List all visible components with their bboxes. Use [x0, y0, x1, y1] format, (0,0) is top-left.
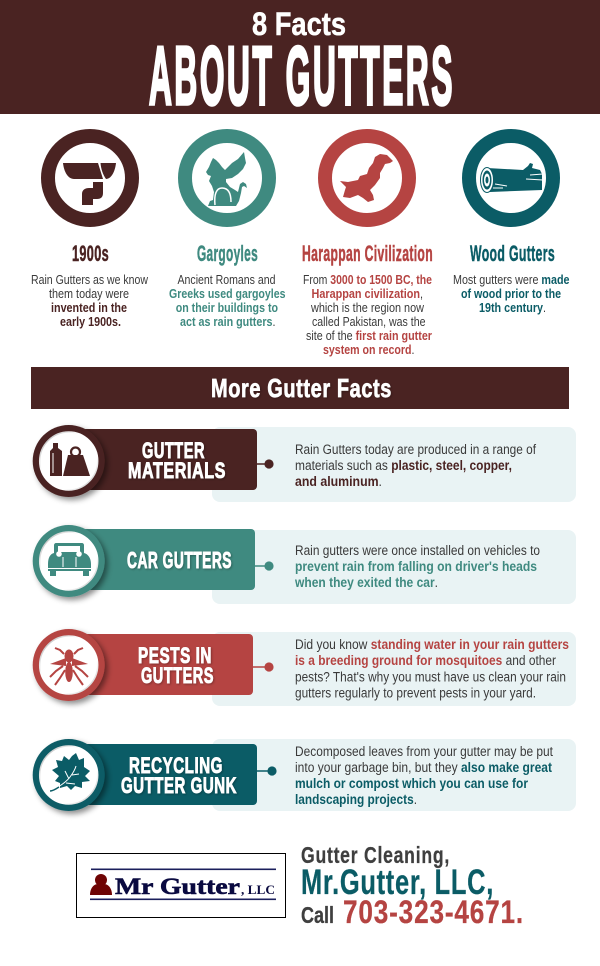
label bar: [80, 634, 253, 695]
banner: more gutter facts: More Gutter Facts: [211, 373, 392, 403]
row: gutter materials: [33, 425, 576, 502]
text: [31, 273, 149, 329]
footer call to action: Call: [301, 902, 334, 928]
icon: gutter: [48, 136, 132, 220]
label bar: CAR GUTTERS: [127, 547, 232, 573]
text panel: into your garbage bin, but they also make great: [295, 760, 552, 775]
text: early 1900s.: [60, 315, 121, 329]
label bar: [80, 529, 255, 590]
text: them today were: [49, 287, 129, 301]
text: Most gutters were made: [453, 273, 570, 287]
text: [169, 273, 286, 329]
icon: mosquito: [33, 629, 105, 701]
header: [0, 0, 600, 122]
banner: more gutter facts: [31, 367, 569, 409]
footer call to action: Mr.Gutter, LLC,: [301, 863, 494, 902]
text panel: mulch or compost which you can use for: [295, 776, 529, 791]
icon: vintage car: [33, 525, 105, 597]
row: car gutters: [33, 525, 576, 604]
text panel: prevent rain from falling on driver's heads: [295, 559, 537, 574]
connector: [255, 561, 274, 571]
text: 19th century.: [479, 301, 546, 315]
label bar: [80, 429, 257, 490]
icon: pakistan map: [325, 136, 409, 220]
connector: [253, 662, 274, 672]
text: on their buildings to: [176, 301, 278, 315]
icon: griffin: [185, 136, 269, 220]
fact: harappan civilization: [302, 136, 433, 357]
text: [303, 273, 432, 357]
text: Rain Gutters as we know: [31, 273, 149, 287]
icon: maple leaf: [33, 739, 105, 811]
text panel: and aluminum.: [295, 474, 382, 489]
text panel: gutters regularly to prevent pests in your yard.: [295, 686, 536, 700]
label bar: RECYCLING: [129, 753, 223, 778]
fact: 1900s: [31, 136, 149, 329]
row: recycling gutter gunk: [33, 739, 576, 811]
logo person: [90, 874, 112, 895]
logo wordmark: Mr Gutter: [115, 874, 240, 899]
text panel: [212, 739, 576, 811]
text panel: landscaping projects.: [295, 792, 417, 807]
footer call to action: Gutter Cleaning,: [301, 842, 450, 868]
footer logo: , LLC: [241, 882, 275, 897]
connector: [257, 459, 274, 469]
text: Greeks used gargoyles: [169, 287, 286, 301]
text panel: pests? That's why you must have us clean your rain: [295, 670, 566, 684]
heading: Gargoyles: [197, 241, 258, 266]
connector: [257, 766, 277, 776]
text: Ancient Romans and: [178, 273, 276, 287]
heading: 1900s: [72, 241, 109, 266]
text panel: when they exited the car.: [294, 575, 438, 590]
text panel: [212, 632, 576, 706]
footer logo: [76, 854, 286, 918]
text: From 3000 to 1500 BC, the: [303, 273, 432, 287]
text panel: [212, 530, 576, 604]
text: which is the region now: [310, 301, 425, 315]
footer call to action: [301, 842, 524, 930]
text panel: Decomposed leaves from your gutter may be put: [295, 744, 553, 759]
icon: log: [469, 136, 553, 220]
text panel: materials such as plastic, steel, copper,: [295, 458, 512, 473]
text panel: is a breeding ground for mosquitoes and other: [295, 653, 556, 668]
text: [453, 273, 570, 315]
text: system on record.: [323, 343, 414, 357]
text panel: [212, 427, 576, 502]
fact: gargoyles: [169, 136, 286, 329]
text: called Pakistan, was the: [312, 315, 426, 329]
label bar: GUTTER: [142, 438, 205, 463]
text: site of the first rain gutter: [306, 329, 432, 343]
heading: Harappan Civilization: [302, 241, 433, 266]
text: invented in the: [51, 301, 127, 315]
label bar: PESTS IN: [138, 643, 212, 668]
row: pests in gutters: [33, 629, 576, 706]
label bar: GUTTER GUNK: [121, 773, 237, 798]
fact: wood gutters: [453, 136, 570, 315]
text: Harappan civilization,: [312, 287, 423, 301]
text panel: Rain gutters were once installed on vehicles to: [295, 543, 540, 558]
label bar: [80, 744, 257, 805]
text panel: Rain Gutters today are produced in a range of: [295, 442, 536, 457]
title line 1: 8 Facts: [252, 6, 346, 42]
label bar: MATERIALS: [128, 458, 226, 483]
icon: bottle and weight: [33, 425, 105, 497]
footer call to action: 703-323-4671.: [343, 894, 524, 930]
text: act as rain gutters.: [180, 315, 276, 329]
text: of wood prior to the: [461, 287, 561, 301]
text panel: Did you know standing water in your rain gutters: [295, 637, 569, 652]
label bar: GUTTERS: [141, 663, 214, 688]
